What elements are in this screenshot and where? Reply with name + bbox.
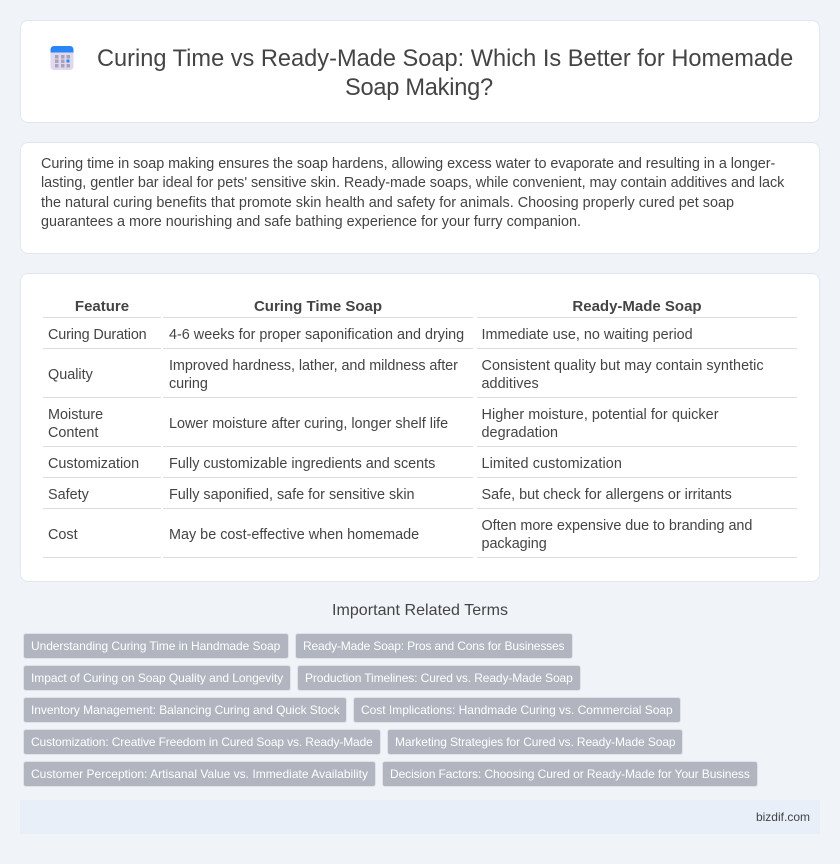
row: quality: curing — [169, 376, 208, 392]
tag: customization — [23, 729, 381, 755]
title — [97, 46, 793, 101]
tag: impact of curing — [23, 665, 291, 691]
tag: customization: Customization: Creative Freedom in Cured Soap vs. Ready-Made — [31, 735, 373, 749]
tag: ready-made pros and cons: Ready-Made Soap: Pros and Cons for Businesses — [303, 639, 564, 653]
row: cost: Cost — [48, 527, 78, 543]
tag: decision factors: Decision Factors: Choosing Cured or Ready-Made for Your Business — [390, 767, 750, 781]
row: curing duration: Immediate use, no waiting period — [482, 327, 693, 343]
table header row: Ready-Made Soap — [572, 298, 702, 315]
table header row — [43, 298, 797, 318]
tag: understanding curing time: Understanding Curing Time in Handmade Soap — [31, 639, 280, 653]
row: quality: Improved hardness, lather, and mildness after — [169, 358, 458, 374]
tag: production timelines: Production Timelines: Cured vs. Ready-Made Soap — [305, 671, 573, 685]
footer bar — [20, 800, 820, 834]
row: customization: Limited customization — [482, 456, 622, 472]
tag: customer perception: Customer Perception: Artisanal Value vs. Immediate Availability — [31, 767, 368, 781]
row: quality: additives — [482, 376, 539, 392]
row: curing duration: Curing Duration — [48, 327, 147, 343]
row: cost: Often more expensive due to branding and — [482, 518, 752, 534]
header panel — [20, 20, 820, 123]
tag: understanding curing time — [23, 633, 289, 659]
row: quality — [43, 358, 797, 398]
footer source: bizdif.com — [756, 810, 810, 824]
row: safety: Fully saponified, safe for sensitive skin — [169, 487, 415, 503]
tag: production timelines — [297, 665, 581, 691]
row: curing duration: 4-6 weeks for proper saponification and drying — [169, 327, 464, 343]
row: customization: Customization — [48, 456, 139, 472]
row: quality: Quality — [48, 367, 93, 383]
row: moisture content: degradation — [482, 425, 558, 441]
tag: cost implications: Cost Implications: Handmade Curing vs. Commercial Soap — [361, 703, 673, 717]
title: Curing Time vs Ready-Made Soap: Which Is Better for Homemade — [97, 46, 793, 72]
tag: decision factors — [382, 761, 758, 787]
row: moisture content: Moisture — [48, 407, 103, 423]
row: moisture content: Lower moisture after curing, longer shelf life — [169, 416, 448, 432]
intro text: lasting, gentler bar ideal for pets' sensitive skin. Ready-made soaps, while convenient, may contain additives and lack — [41, 175, 784, 191]
tag: ready-made pros and cons — [295, 633, 573, 659]
icon: calendar — [50, 46, 74, 70]
intro text: Curing time in soap making ensures the soap hardens, allowing excess water to evaporate and resulting in a longer- — [41, 156, 775, 172]
row: safety: Safety — [48, 487, 89, 503]
row: quality: Consistent quality but may contain synthetic — [482, 358, 764, 374]
row: moisture content: Content — [48, 425, 98, 441]
table header row: Curing Time Soap — [254, 298, 382, 315]
related term tags — [23, 633, 758, 787]
tag: customer perception — [23, 761, 376, 787]
row: curing duration — [43, 327, 797, 349]
row: safety: Safe, but check for allergens or irritants — [482, 487, 732, 503]
tag: marketing strategies: Marketing Strategies for Cured vs. Ready-Made Soap — [395, 735, 675, 749]
comparison table — [43, 298, 797, 558]
row: moisture content — [43, 407, 797, 447]
row: cost: packaging — [482, 536, 547, 552]
row: customization: Fully customizable ingredients and scents — [169, 456, 435, 472]
intro panel — [20, 142, 820, 254]
intro text — [41, 156, 784, 230]
row: customization — [43, 456, 797, 478]
comparison table panel — [20, 273, 820, 582]
row: safety — [43, 487, 797, 509]
intro text: the natural curing benefits that promote skin health and safety for animals. Choosing properly cured pet soap — [41, 195, 734, 211]
tag: marketing strategies — [387, 729, 683, 755]
table header row: Feature — [75, 298, 129, 315]
tag: inventory management: Inventory Management: Balancing Curing and Quick Stock — [31, 703, 340, 717]
row: cost — [43, 518, 797, 558]
row: moisture content: Higher moisture, potential for quicker — [482, 407, 719, 423]
tag: cost implications — [353, 697, 681, 723]
tag: inventory management — [23, 697, 347, 723]
row: cost: May be cost-effective when homemade — [169, 527, 419, 543]
tag: impact of curing: Impact of Curing on Soap Quality and Longevity — [31, 671, 283, 685]
intro text: guarantees a more nourishing and safe bathing experience for your furry companion. — [41, 214, 581, 230]
title: Soap Making? — [345, 75, 493, 101]
related terms heading: Important Related Terms — [332, 602, 508, 619]
